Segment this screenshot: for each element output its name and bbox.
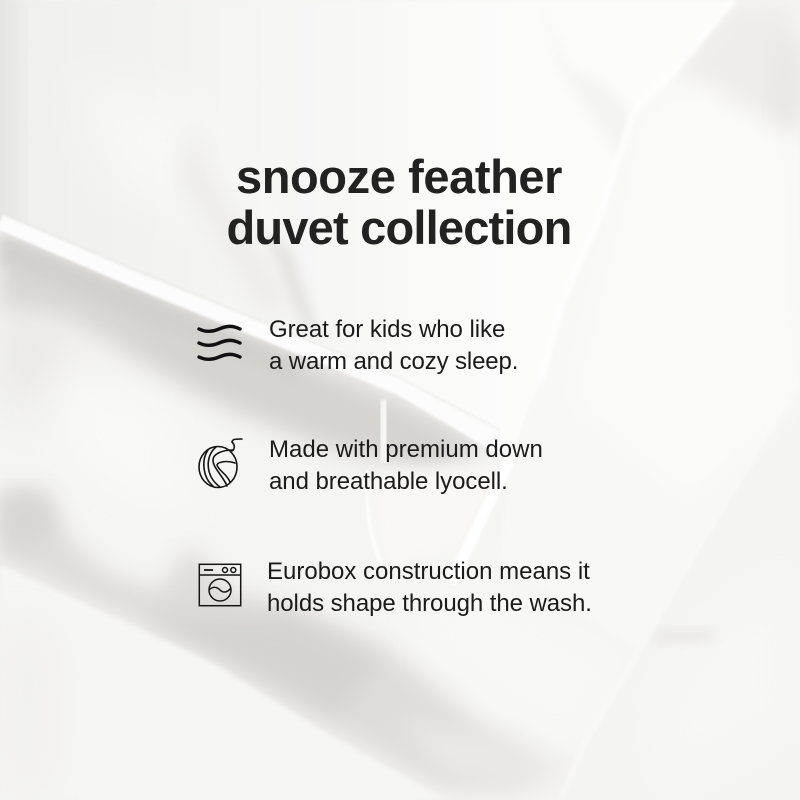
flap piping — [0, 222, 510, 452]
title: snooze feather — [236, 150, 562, 203]
middle panel tones — [0, 240, 640, 800]
icon: washing machine — [198, 564, 242, 606]
text: warm and cozy: Great for kids who like — [269, 316, 505, 343]
title — [226, 150, 571, 254]
text: warm and cozy — [269, 316, 518, 375]
right lower panel — [560, 375, 800, 800]
text: premium down: Made with premium down — [269, 436, 543, 463]
text: premium down: and breathable lyocell. — [269, 468, 508, 495]
bottom-left quilted panel — [0, 565, 445, 800]
fabric loop — [381, 400, 386, 462]
lower quilt seams — [560, 375, 800, 800]
shadow above lower seam — [0, 490, 540, 790]
flap surface — [0, 0, 733, 460]
icon: waves — [197, 324, 242, 361]
text: eurobox construction: Eurobox construction means it — [267, 558, 590, 585]
title: duvet collection — [226, 201, 571, 254]
text: warm and cozy: a warm and cozy sleep. — [269, 348, 518, 375]
text: eurobox construction — [267, 558, 592, 617]
right upper panel — [500, 0, 800, 650]
flap side seam — [540, 0, 733, 383]
loop interior — [374, 470, 500, 566]
icon: yarn ball — [198, 438, 243, 488]
text: premium down — [269, 436, 543, 495]
duvet tab — [450, 460, 510, 583]
text: eurobox construction: holds shape through the wash. — [267, 590, 592, 617]
shadow under flap — [0, 232, 490, 470]
